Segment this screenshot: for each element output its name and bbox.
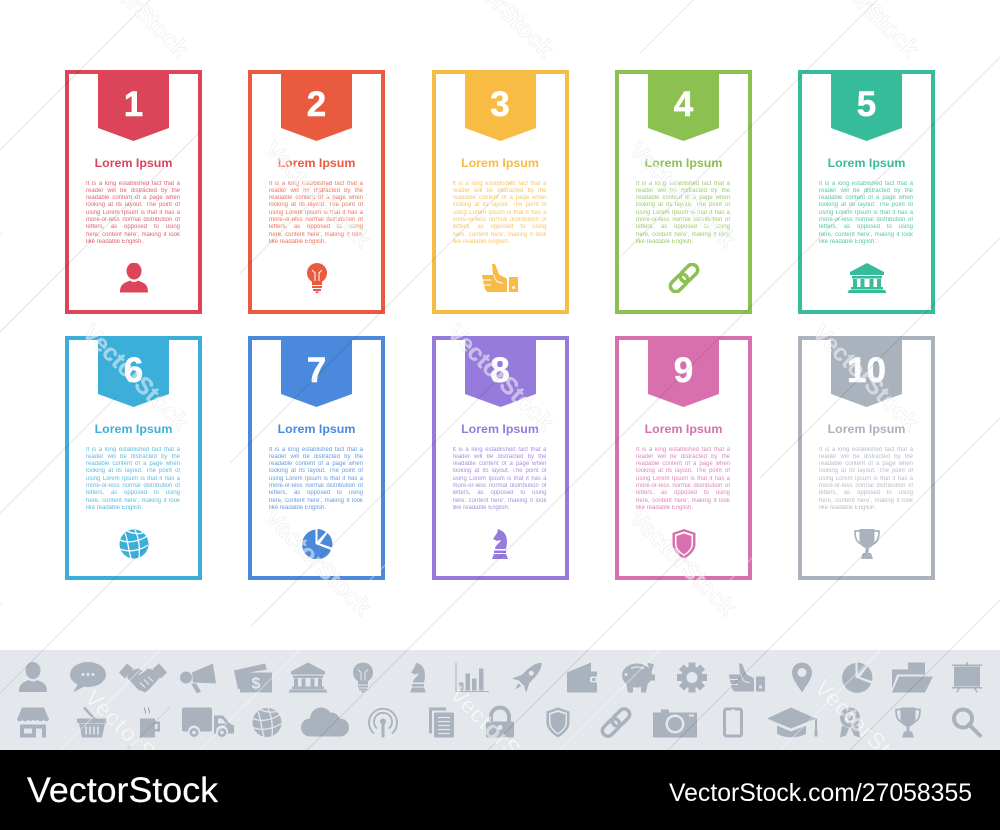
text block 1: It is a long established fact that a — [86, 180, 180, 186]
icon: chess knight — [410, 662, 426, 692]
ribbon 8 — [465, 340, 536, 407]
text block 2: using Lorem Ipsum is that it has a — [269, 210, 363, 216]
footer image id: VectorStock.com/27058355 — [669, 779, 972, 807]
panel: card 6 — [65, 336, 202, 580]
text block 8: readable content of a page when — [452, 461, 546, 467]
icon: document — [429, 708, 454, 738]
icon: pie chart — [842, 662, 872, 693]
icon: truck — [182, 708, 234, 738]
text block 9: It is a long established fact that a — [636, 446, 730, 452]
ribbon 10 — [831, 340, 902, 407]
icon: globe — [120, 530, 148, 558]
text block 3: more-or-less normal distribution of — [452, 217, 546, 223]
text block 7: using Lorem Ipsum is that it has a — [269, 476, 363, 482]
text block 3: readable content of a page when — [452, 195, 546, 201]
text block 4: like readable English. — [636, 239, 693, 245]
text block 1 — [86, 180, 180, 245]
text block 8: like readable English. — [452, 505, 510, 511]
heading 10: Lorem Ipsum — [828, 422, 905, 436]
text block 1: here, content here', making it look — [86, 232, 180, 238]
heading 3: Lorem Ipsum — [461, 156, 539, 170]
text block 10 — [819, 446, 913, 511]
icon: graduation cap — [767, 708, 818, 737]
heading 7: Lorem Ipsum — [278, 422, 355, 436]
text block 7: more-or-less normal distribution of — [269, 483, 363, 489]
text block 5: using Lorem Ipsum is that it has a — [819, 210, 913, 216]
panel: card 4 — [615, 70, 752, 314]
heading 2: Lorem Ipsum — [278, 156, 355, 170]
text block 2: reader will be distracted by the — [269, 188, 363, 194]
icon: shield — [672, 529, 696, 559]
text block 7: like readable English. — [269, 505, 326, 511]
text block 10: It is a long established fact that a — [819, 446, 913, 452]
text block 8: here, content here', making it look — [452, 498, 546, 504]
text block 8: using Lorem Ipsum is that it has a — [452, 476, 546, 482]
text block 7: here, content here', making it look — [269, 498, 363, 504]
icon: person — [120, 263, 148, 292]
watermark overlay: VectorStock — [259, 504, 376, 622]
icon: trophy — [896, 708, 920, 738]
icon: bank — [848, 263, 886, 293]
text block 2: here, content here', making it look — [269, 232, 363, 238]
text block 6: more-or-less normal distribution of — [86, 483, 180, 489]
icon: lock — [486, 708, 514, 738]
text block 1: reader will be distracted by the — [86, 188, 180, 194]
panel: card 7 — [248, 336, 385, 580]
text block 2: looking at its layout. The point of — [269, 202, 363, 208]
text block 4: looking at its layout. The point of — [636, 202, 730, 208]
number 6: 6 — [124, 351, 143, 390]
text block 5: readable content of a page when — [819, 195, 913, 201]
text block 7: It is a long established fact that a — [269, 446, 363, 452]
ribbon 2 — [281, 74, 352, 141]
text block 3: It is a long established fact that a — [452, 180, 546, 186]
text block 4: using Lorem Ipsum is that it has a — [636, 210, 730, 216]
icon: cloud — [301, 708, 349, 736]
text block 1: like readable English. — [86, 239, 143, 245]
icon: coffee cup — [140, 708, 160, 738]
text block 10: here, content here', making it look — [819, 498, 913, 504]
icon: award badge — [840, 708, 860, 738]
icon: map pin — [792, 662, 812, 692]
icon: trophy — [854, 529, 880, 559]
text block 9 — [636, 446, 730, 511]
text block 10: like readable English. — [819, 505, 876, 511]
number 4: 4 — [674, 85, 693, 124]
watermark overlay: VectorStock — [624, 136, 741, 254]
text block 9: readable content of a page when — [636, 461, 730, 467]
text block 5: like readable English. — [819, 239, 876, 245]
text block 2: It is a long established fact that a — [269, 180, 363, 186]
text block 7: readable content of a page when — [269, 461, 363, 467]
text block 3 — [452, 180, 547, 245]
text block 1: using Lorem Ipsum is that it has a — [86, 210, 180, 216]
text block 7: reader will be distracted by the — [269, 454, 363, 460]
text block 9: reader will be distracted by the — [636, 454, 730, 460]
text block 8: looking at its layout. The point of — [452, 468, 546, 474]
text block 10: readable content of a page when — [819, 461, 913, 467]
text block 2: readable content of a page when — [269, 195, 363, 201]
ribbon 7 — [281, 340, 352, 407]
icon: thumbs up — [729, 664, 765, 692]
icon: wallet — [567, 662, 598, 692]
text block 10: using Lorem Ipsum is that it has a — [819, 476, 913, 482]
text block 2: more-or-less normal distribution of — [269, 217, 363, 223]
text block 9: looking at its layout. The point of — [636, 468, 730, 474]
icon: piggy bank — [622, 662, 655, 692]
text block 7: looking at its layout. The point of — [269, 468, 363, 474]
text block 4: more-or-less normal distribution of — [636, 217, 730, 223]
heading 8: Lorem Ipsum — [461, 422, 539, 436]
text block 6: using Lorem Ipsum is that it has a — [86, 476, 180, 482]
icon: handshake — [119, 664, 167, 692]
panel: card 9 — [615, 336, 752, 580]
text block 1: more-or-less normal distribution of — [86, 217, 180, 223]
ribbon 1 — [98, 74, 169, 141]
text block 4 — [636, 180, 730, 245]
watermark overlay: VectorStock — [807, 319, 924, 437]
number 9: 9 — [674, 351, 693, 390]
icon: shield — [546, 708, 570, 738]
text block 5: reader will be distracted by the — [819, 188, 913, 194]
number 1: 1 — [124, 85, 143, 124]
text block 2: like readable English. — [269, 239, 326, 245]
text block 6: It is a long established fact that a — [86, 446, 180, 452]
panel: card 3 — [432, 70, 568, 314]
icon: light bulb — [353, 662, 373, 692]
heading 1: Lorem Ipsum — [95, 156, 172, 170]
icon: bar chart — [456, 662, 489, 692]
text block 6: looking at its layout. The point of — [86, 468, 180, 474]
text block 5: more-or-less normal distribution of — [819, 217, 913, 223]
icon: megaphone — [180, 664, 216, 694]
text block 6: like readable English. — [86, 505, 143, 511]
icon: globe — [252, 708, 282, 737]
icon: bank — [288, 662, 328, 692]
icon: light bulb — [307, 263, 327, 293]
text block 3: reader will be distracted by the — [452, 188, 546, 194]
heading 6: Lorem Ipsum — [95, 422, 172, 436]
text block 4: reader will be distracted by the — [636, 188, 730, 194]
number 10: 10 — [847, 351, 886, 390]
icon: chess knight — [492, 529, 508, 559]
text block 3: looking at its layout. The point of — [452, 202, 546, 208]
text block 4: It is a long established fact that a — [636, 180, 730, 186]
icon: rocket — [508, 656, 549, 697]
number 8: 8 — [490, 351, 510, 390]
panel: card 10 — [798, 336, 935, 580]
panel: icon strip — [0, 650, 1000, 750]
ribbon 4 — [648, 74, 719, 141]
text block 8: It is a long established fact that a — [452, 446, 546, 452]
heading 9: Lorem Ipsum — [645, 422, 722, 436]
text block 9: using Lorem Ipsum is that it has a — [636, 476, 730, 482]
text block 10: reader will be distracted by the — [819, 454, 913, 460]
text block 5 — [819, 180, 913, 245]
icon: gear — [677, 662, 707, 692]
text block 3: here, content here', making it look — [452, 232, 546, 238]
icon: shop — [17, 708, 49, 738]
text block 5: It is a long established fact that a — [819, 180, 913, 186]
text block 3: like readable English. — [452, 239, 510, 245]
text block 1: readable content of a page when — [86, 195, 180, 201]
text block 9: more-or-less normal distribution of — [636, 483, 730, 489]
watermark overlay: VectorStock — [624, 504, 741, 622]
heading 4: Lorem Ipsum — [645, 156, 722, 170]
ribbon 9 — [648, 340, 719, 407]
heading 5: Lorem Ipsum — [828, 156, 905, 170]
icon: smartphone — [724, 709, 742, 736]
text block 6: here, content here', making it look — [86, 498, 180, 504]
text block 8 — [452, 446, 547, 511]
text block 3: using Lorem Ipsum is that it has a — [452, 210, 546, 216]
text block 1: looking at its layout. The point of — [86, 202, 180, 208]
icon: presentation board — [952, 662, 982, 692]
ribbon 6 — [98, 340, 169, 407]
watermark overlay: VectorStock — [259, 136, 376, 254]
watermark overlay: VectorStock — [77, 319, 194, 437]
text block 9: here, content here', making it look — [636, 498, 730, 504]
text block 5: here, content here', making it look — [819, 232, 913, 238]
number 7: 7 — [307, 351, 326, 390]
text block 5: looking at its layout. The point of — [819, 202, 913, 208]
icon: basket — [77, 708, 107, 738]
text block 10: more-or-less normal distribution of — [819, 483, 913, 489]
panel: card 5 — [798, 70, 935, 314]
panel: card 1 — [65, 70, 202, 314]
text block 6 — [86, 446, 180, 511]
text block 4: readable content of a page when — [636, 195, 730, 201]
text block 6: readable content of a page when — [86, 461, 180, 467]
icon: chain link — [600, 707, 632, 738]
icon: money — [234, 664, 272, 692]
number 2: 2 — [307, 85, 326, 124]
ribbon 3 — [465, 74, 536, 141]
number 3: 3 — [490, 85, 510, 124]
text block 10: looking at its layout. The point of — [819, 468, 913, 474]
panel: card 2 — [248, 70, 385, 314]
icon: money: $ — [252, 676, 261, 692]
footer banner — [0, 750, 1000, 830]
ribbon 5 — [831, 74, 902, 141]
icon: thumbs up — [482, 264, 518, 292]
text block 8: more-or-less normal distribution of — [452, 483, 546, 489]
text block 6: reader will be distracted by the — [86, 454, 180, 460]
icon: pie chart — [302, 529, 332, 559]
number 5: 5 — [857, 85, 876, 124]
icon: broadcast — [369, 709, 397, 738]
icon: folder — [892, 662, 933, 692]
icon: person — [19, 662, 47, 692]
panel: card 8 — [432, 336, 568, 580]
icon: magnifier — [954, 710, 980, 736]
icon: chain link — [668, 263, 700, 293]
icon: camera — [653, 710, 697, 738]
text block 8: reader will be distracted by the — [452, 454, 546, 460]
footer logo: VectorStock — [27, 771, 219, 810]
icon: speech bubble — [70, 662, 106, 692]
text block 9: like readable English. — [636, 505, 693, 511]
watermark overlay: VectorStock — [442, 319, 559, 437]
text block 4: here, content here', making it look — [636, 232, 730, 238]
text block 7 — [269, 446, 363, 511]
text block 2 — [269, 180, 363, 245]
